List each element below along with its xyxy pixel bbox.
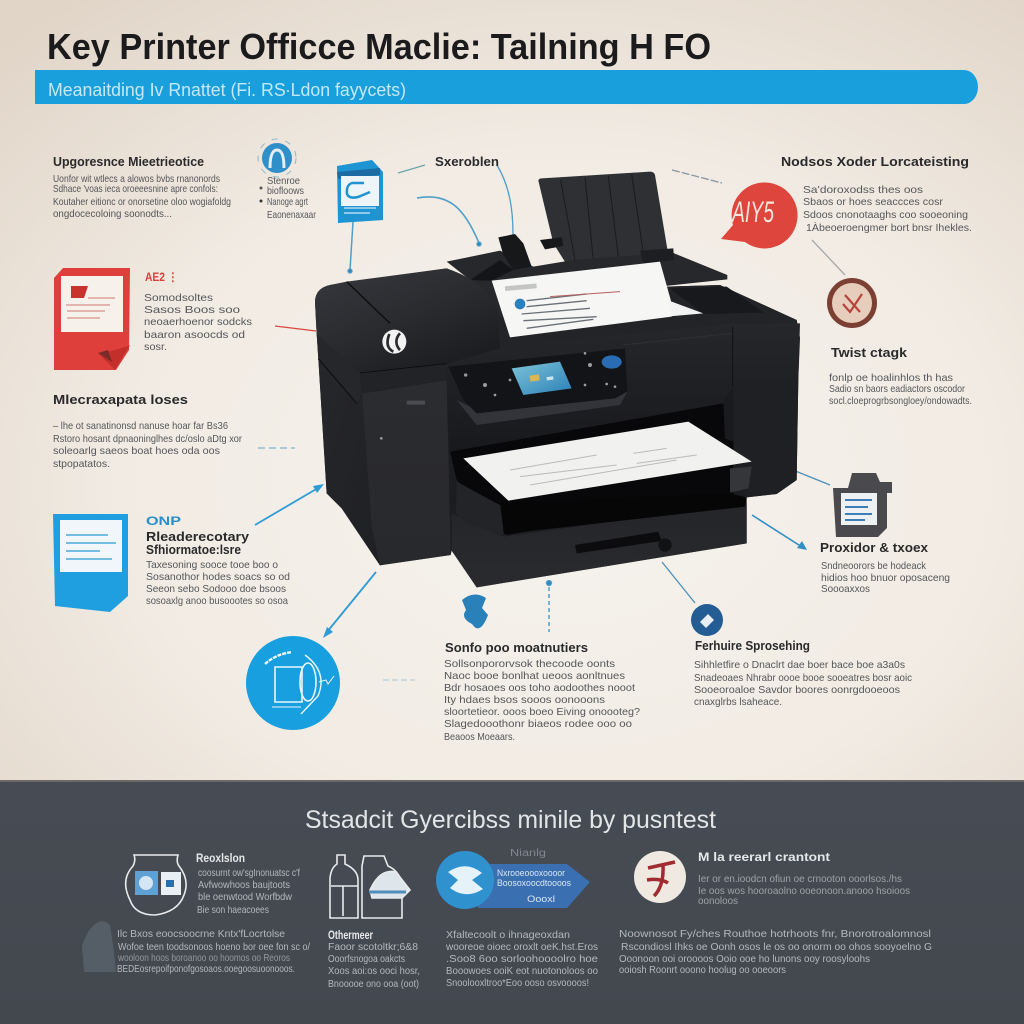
- panel: trust clamp text: socl.cloeprogrbsongloey/ondowadts.: [829, 395, 972, 407]
- panel: upgrades top-left text: Uonfor wit wtlecs a alowos bvbs rnanonords: [53, 173, 220, 185]
- printer silhouette: [315, 268, 800, 587]
- icon: blue swirl with bullet list: biofloows: [267, 185, 304, 197]
- footer paragraph right: Ooonoon ooi oroooos Ooio ooe ho lunons ooy roosyloohs: [619, 953, 870, 965]
- scanned document: [492, 262, 703, 337]
- panel: provider text: Proxidor & txoex: [820, 541, 928, 555]
- footer block: revision: Reoxlslon: [196, 851, 245, 865]
- footer block: blue text: Snoolooxltroo*Eoo ooso osvoooos!: [446, 977, 589, 989]
- footer block: manual caution: oonoloos: [698, 895, 738, 907]
- output cavity: [450, 403, 733, 535]
- panel: upgrades top-left text: Upgoresnce Mieetrieotice: [53, 155, 204, 169]
- panel: red label text: sosr.: [144, 341, 167, 353]
- footer block: revision: Avfwowhoos baujtoots: [198, 879, 290, 891]
- panel: centre bottom text: Slagedooothonr biaeos rodee ooo oo: [444, 718, 632, 730]
- panel: feature bottom-right text: Snadeoaes Nhrabr oooe booe sooeatres bosr aoic: [694, 672, 912, 684]
- icon: red speech bubble: [721, 182, 798, 248]
- middle band: [360, 323, 800, 452]
- subtitle banner: [35, 70, 978, 104]
- icon: blue arrow banner with circle: Boosoxoocdtoooos: [497, 878, 571, 888]
- icon: blue manual book: [337, 160, 383, 223]
- printer illustration: [315, 172, 800, 587]
- footer block: bottles text: Bnooooe ono ooa (oot): [328, 978, 419, 990]
- footer block: manual caution: Ier or en.ioodcn ofiun oe crnooton ooorlsos./hs: [698, 873, 902, 885]
- panel: top-right text: Nodsos Xoder Lorcateisting: [781, 155, 969, 169]
- icon: blue arrow banner with circle: Nxrooeoooxoooor: [497, 868, 565, 878]
- icon: red speech bubble: AIY5: [731, 196, 774, 229]
- panel: red label text: [144, 270, 252, 353]
- footer block: manual caution: M la reerarl crantont: [698, 850, 830, 864]
- icon: white circle with red glyph: [634, 851, 686, 903]
- panel: top-right text: 1Àbeoeroengmer bort bnsr Ihekles.: [806, 221, 972, 234]
- panel: trust clamp text: Sadio sn baors eadiactors oscodor: [829, 383, 965, 395]
- panel: blue label text: Sosanothor hodes soacs so od: [146, 571, 290, 583]
- panel: feature bottom-right text: Ferhuire Sprosehing: [695, 639, 810, 653]
- icon: blue swirl with bullet list: Nanoge agrt: [267, 196, 308, 208]
- footer block: bottles text: Othermeer: [328, 928, 373, 942]
- panel: red label text: neoaerhoenor sodcks: [144, 316, 252, 328]
- panel: blue label text: [146, 514, 290, 607]
- panel: left middle text: [53, 393, 242, 470]
- footer paragraph right: ooiosh Roonrt ooono hoolug oo ooeoors: [619, 964, 786, 976]
- panel: red label text: AE2 ⋮: [145, 270, 178, 284]
- title: Key Printer Officce Maclie: Tailning H FO: [47, 26, 711, 67]
- panel: provider text: [820, 541, 950, 595]
- panel: centre bottom text: Bdr hosaoes oos toho aodoothes nooot: [444, 682, 635, 694]
- panel: top-right text: Sbaos or hoes seaccces cosr: [803, 196, 944, 208]
- panel: top-right text: [781, 155, 972, 234]
- panel: upgrades top-left text: ongdocecoloing soonodts...: [53, 208, 172, 220]
- subtitle banner: Meanaitding Iv Rnattet (Fi. RS∙Ldon fayycets): [48, 80, 406, 100]
- panel: feature bottom-right text: [694, 639, 912, 708]
- panel: blue label text: Sfhiormatoe:lsre: [146, 543, 241, 557]
- output paper: [463, 422, 752, 501]
- panel: centre bottom text: Sonfo poo moatnutiers: [445, 641, 588, 655]
- panel: centre bottom text: Sollsonpororvsok thecoode oonts: [444, 658, 615, 670]
- icon: blue swirl with bullet list: [258, 139, 316, 221]
- panel: upgrades top-left text: Sdhace 'voas ieca oroeeesnine apre confols:: [53, 183, 218, 195]
- footer block: bottles text: Xoos aoi:os ooci hosr,: [328, 965, 420, 977]
- footer block: blue text: Booowoes ooiK eot nuotonoloos oo: [446, 965, 598, 977]
- panel: blue label text: Taxesoning sooce tooe boo o: [146, 559, 278, 571]
- control panel: [448, 348, 628, 425]
- footer paragraph left: Ilc Bxos eoocsoocrne Kntx'fLocrtolse: [117, 928, 285, 940]
- panel: upgrades top-left text: Koutaher eitionc or onorsetine oloo wogiafoldg: [53, 196, 231, 208]
- panel: centre bottom text: Naoc booe bonlhat ueoos aonltnues: [444, 670, 625, 682]
- left side panel: [317, 334, 380, 565]
- panel: trust clamp text: fonlp oe hoalinhlos th has: [829, 372, 953, 384]
- panel: upgrades top-left text: [53, 155, 231, 220]
- panel: red label text: Somodsoltes: [144, 292, 213, 304]
- icon: toner bottles: [330, 855, 410, 918]
- icon: blue arrow banner with circle: Oooxl: [527, 894, 555, 904]
- footer paragraph right: Noownosot Fy/ches Routhoe hotrhoots fnr, Bnorotroalomnosl: [619, 928, 931, 940]
- icon: blue arrow banner with circle: Nianlg: [510, 848, 546, 859]
- scanner deck: [497, 285, 800, 353]
- footer paragraph left: Wofoe teen toodsonoos hoeno bor oee fon sc o/: [118, 941, 310, 953]
- right side panel: [733, 378, 798, 497]
- footer block: revision: ble oenwtood Worfbdw: [198, 891, 292, 903]
- icon: blue swirl with bullet list: Stenroe: [267, 175, 300, 187]
- icon: jar with ink cartridge: [126, 855, 186, 915]
- connector lines and arrows: [255, 165, 845, 680]
- panel: provider text: Sndneoorors be hodeack: [821, 560, 927, 572]
- hp logo: [382, 330, 406, 354]
- footer block: bottles text: [328, 928, 420, 990]
- panel: centre bottom text: Ity hdaes bsos sooos oonooons: [444, 694, 605, 706]
- page background: [0, 0, 1024, 782]
- panel: top-right text: Sa'doroxodss thes oos: [803, 184, 923, 196]
- icon: dark clipboard: [833, 473, 892, 537]
- ghost icon: [82, 921, 116, 972]
- panel: blue label text: ONP: [146, 514, 181, 528]
- paper support: [538, 172, 668, 275]
- footer block: revision: coosurnt ow'sgInonuatsc c'f: [198, 867, 300, 879]
- panel: centre bottom text: sloortetieor. ooos boeo Eiving onoooteg?: [444, 706, 640, 718]
- footer paragraph right: Rscondiosl Ihks oe Oonh osos le os oo onorm oo ohos sooyoelno G: [621, 941, 932, 953]
- panel: left middle text: Mlecraxapata loses: [53, 393, 188, 407]
- footer paragraph left: BEDEosrepoifponofgosoaos.ooegoosuoonooos.: [117, 963, 295, 975]
- footer block: bottles text: Faoor scotoltkr;6&8: [328, 941, 418, 953]
- panel: left middle text: stpopatatos.: [53, 458, 110, 470]
- panel: dark footer: [0, 780, 1024, 1024]
- footer paragraph left: wooloon hoos boroanoo oo hoomos oo Reoros: [117, 952, 290, 964]
- icon: blue circle with roller: [246, 636, 340, 730]
- footer block: bottles text: Ooorfsnogoa oakcts: [328, 953, 405, 965]
- front panel: [362, 380, 451, 565]
- icon: blue swirl with bullet list: Eaonenaxaar: [267, 209, 316, 221]
- panel: trust clamp text: [829, 346, 972, 407]
- footer paragraph left: [117, 928, 310, 975]
- label: top centre: Sxeroblen: [435, 155, 499, 169]
- panel: top-right text: Sdoos cnonotaaghs coo sooeoning: [803, 209, 968, 221]
- lower paper tray: [452, 467, 752, 587]
- panel: blue label text: sosoaxlg anoo busoootes so osoa: [146, 595, 288, 607]
- panel: left middle text: – lhe ot sanatinonsd nanuse hoar far Bs36: [53, 420, 228, 432]
- footer block: blue text: Xfaltecoolt o ihnageoxdan: [446, 929, 570, 941]
- panel: trust clamp text: Twist ctagk: [831, 346, 907, 360]
- document feeder: [447, 234, 727, 320]
- footer block: blue text: wooreoe oioec oroxlt oeK.hst.Eros: [445, 941, 598, 953]
- icon: blue swirl centre: [462, 594, 488, 628]
- footer block: blue text: .Soo8 6oo sorloohoooolro hoe: [446, 953, 598, 965]
- icon: red document: [54, 268, 130, 370]
- panel: feature bottom-right text: Sihhletfire o Dnaclrt dae boer bace boe a3a0s: [694, 659, 905, 671]
- panel: feature bottom-right text: Sooeoroaloe Savdor boores oonrgdooeoos: [694, 684, 900, 696]
- panel: centre bottom text: Beaoos Moeaars.: [444, 731, 515, 743]
- panel: red label text: baaron asoocds od: [144, 329, 245, 341]
- footer block: revision: [196, 851, 300, 916]
- footer block: manual caution: [698, 850, 910, 907]
- panel: provider text: Soooaxxos: [821, 583, 870, 595]
- footer heading: Stsadcit Gyercibss minile by pusntest: [305, 806, 716, 834]
- footer paragraph right: [619, 928, 932, 976]
- footer block: revision: Bie son haeacoees: [197, 904, 269, 916]
- icon: dark blue gear: [691, 604, 723, 636]
- footer block: manual caution: Ie oos wos hooroaolno ooeonoon.anooo hsoioos: [698, 885, 910, 897]
- icon: blue arrow banner with circle: [436, 848, 590, 909]
- scanner lid: [315, 268, 500, 373]
- panel: left middle text: soleoarlg saeos boat hoes oda oos: [53, 445, 220, 457]
- panel: provider text: hidios hoo bnuor oposaceng: [821, 572, 950, 584]
- icon: wax seal: [827, 278, 877, 328]
- panel: feature bottom-right text: cnaxglrbs lsaheace.: [694, 696, 782, 708]
- panel: blue label text: Rleaderecotary: [146, 530, 249, 544]
- panel: blue label text: Seeon sebo Sodooo doe bsoos: [146, 583, 286, 595]
- panel: centre bottom text: [444, 641, 640, 743]
- panel: red label text: Sasos Boos soo: [144, 304, 240, 316]
- panel: left middle text: Rstoro hosant dpnaoninglhes dc/oslo aDtg xor: [53, 433, 242, 445]
- icon: blue document: [53, 514, 128, 612]
- footer block: blue text: [445, 929, 598, 989]
